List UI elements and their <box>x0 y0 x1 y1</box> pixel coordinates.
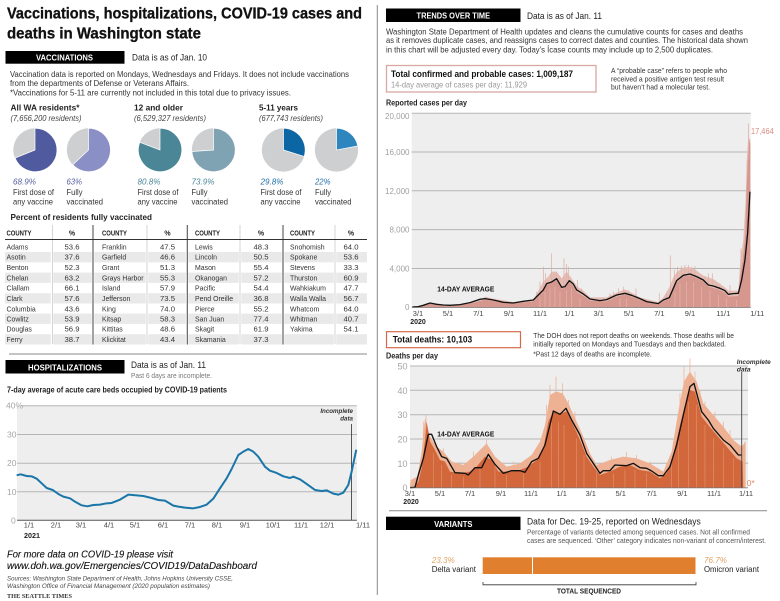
sources: Washington Office of Financial Management (2020 population estimates) <box>7 583 210 590</box>
pie group: 5-11 years: 5-11 years <box>259 102 298 112</box>
line chart: acute care beds: 0 <box>11 516 16 526</box>
note: probable case <box>611 66 727 92</box>
line chart: acute care beds: 30 <box>7 430 17 440</box>
table: percent fully vaccinated by county: 64.0 <box>344 304 358 313</box>
chart: deaths per day: 10 <box>397 459 408 469</box>
pie group: all WA residents: All WA residents* <box>10 102 80 112</box>
chart: deaths per day: 14-DAY AVERAGE <box>437 430 494 438</box>
label: omicron variant: Omicron variant <box>704 565 760 574</box>
line chart: acute care beds: 8/1 <box>212 520 222 530</box>
text block: vaccination notes: Vaccination data is reported on Mondays, Wednesdays and Fridays. It does not include vaccinations <box>10 70 349 79</box>
text block: vaccination notes: from the departments of Defense or Veterans Affairs. <box>10 79 189 88</box>
chart: reported cases per day: 1/11 <box>750 309 764 318</box>
text block: trends explanation: as it removes duplicate cases, and reassigns cases to correct dates and counties. The historical data shown <box>386 36 748 45</box>
chart: deaths per day: 7/1 <box>465 489 475 498</box>
heading: vaccinations: Data is as of Jan. 10 <box>132 52 207 62</box>
table: percent fully vaccinated by county: 43.4 <box>160 335 176 344</box>
chart: deaths per day: 3/1 <box>405 489 415 498</box>
note: deaths reporting <box>533 331 734 358</box>
table: percent fully vaccinated by county: 37.6 <box>65 253 79 262</box>
text block: trends explanation: in this chart will be adjusted every day. Today’s Ícase counts may include up to 2,500 duplicates. <box>386 46 713 55</box>
line chart: acute care beds: 10/1 <box>266 520 280 530</box>
table: percent fully vaccinated by county: 48.6 <box>160 325 175 334</box>
pie group: 5-11 years: vaccinated <box>315 197 352 206</box>
table heading: Percent of residents fully vaccinated <box>10 212 152 222</box>
heading: trends over time: Data is as of Jan. 11 <box>527 11 602 21</box>
heading: vaccinations: VACCINATIONS <box>36 53 93 62</box>
chart: reported cases per day: 3/1 <box>413 309 423 318</box>
table: percent fully vaccinated by county: Klickitat <box>102 335 126 344</box>
text block: trends explanation: Washington State Department of Health updates and cleans the cumulative counts for cases and deaths <box>386 27 743 36</box>
chart: deaths per day <box>397 358 771 506</box>
note: deaths reporting: initially reported on Mondays and Tuesdays and then backdated. <box>533 339 726 348</box>
stacked bar: variants <box>483 557 696 574</box>
pie group: 12 and older: First dose of <box>138 188 179 197</box>
table: percent fully vaccinated by county: 52.3 <box>65 263 79 272</box>
table: percent fully vaccinated by county: Pend Oreille <box>195 294 233 303</box>
pie group: all WA residents: vaccinated <box>66 197 103 206</box>
table: percent fully vaccinated by county: 56.7 <box>344 294 358 303</box>
table: percent fully vaccinated by county <box>5 225 367 345</box>
chart: reported cases per day: 4,000 <box>389 264 410 274</box>
heading: hospitalizations <box>6 360 212 380</box>
line chart: acute care beds: 12/1 <box>320 520 334 530</box>
panel: trends over time <box>385 8 774 506</box>
table: percent fully vaccinated by county: Douglas <box>6 324 32 334</box>
heading: hospitalizations: HOSPITALIZATIONS <box>28 362 102 372</box>
text block: variants note: Percentage of variants detected among sequenced cases. Not all confirmed <box>527 528 750 536</box>
table: percent fully vaccinated by county: 53.6 <box>65 242 79 251</box>
note: probable case: but haven’t had a molecular test. <box>611 83 710 92</box>
callout: total cases: Total confirmed and probable cases: 1,009,187 <box>391 69 573 80</box>
label: omicron variant: 76.7% <box>704 555 727 565</box>
pie group: 12 and older: 12 and older <box>134 102 184 112</box>
table: percent fully vaccinated by county: 53.9 <box>65 314 79 323</box>
line chart: acute care beds: 5/1 <box>130 520 140 530</box>
table: percent fully vaccinated by county: 38.7 <box>65 335 79 344</box>
chart: reported cases per day: 0 <box>405 303 410 312</box>
heading: variants <box>386 516 701 530</box>
table: percent fully vaccinated by county: 73.5 <box>160 294 175 303</box>
pie group: 12 and older: 73.9% <box>192 176 215 186</box>
pie group: 5-11 years: any vaccine <box>260 197 300 206</box>
table: percent fully vaccinated by county: Jefferson <box>102 294 130 303</box>
table: percent fully vaccinated by county: 48.3 <box>254 242 268 251</box>
table: percent fully vaccinated by county: Kittitas <box>102 324 123 334</box>
table: percent fully vaccinated by county: Columbia <box>6 304 37 313</box>
table: percent fully vaccinated by county: 60.9 <box>344 273 358 282</box>
table: percent fully vaccinated by county: 64.0 <box>344 242 358 251</box>
table: percent fully vaccinated by county: 50.5 <box>254 253 268 262</box>
panel divider <box>376 5 378 595</box>
line chart: acute care beds: 4/1 <box>104 520 114 530</box>
table: percent fully vaccinated by county: 57.6 <box>65 294 79 303</box>
line chart: acute care beds: 11/1 <box>294 520 308 530</box>
table: percent fully vaccinated by county: Cowlitz <box>6 314 29 324</box>
table: percent fully vaccinated by county: Skagit <box>195 324 214 334</box>
chart: deaths per day: 11/1 <box>707 489 721 498</box>
table: percent fully vaccinated by county: 40.7 <box>344 314 358 323</box>
table: percent fully vaccinated by county: Asotin <box>6 252 26 262</box>
line chart: acute care beds: 2021 <box>24 531 40 540</box>
table: percent fully vaccinated by county: Grays Harbor <box>102 273 144 282</box>
heading: hospitalizations: Data is as of Jan. 11 <box>131 360 206 370</box>
line chart: acute care beds: 6/1 <box>158 520 168 530</box>
text block: vaccination notes <box>10 70 349 97</box>
table: percent fully vaccinated by county: 43.6 <box>65 304 79 313</box>
chart heading: 7-day average of acute care beds occupied by COVID-19 patients <box>7 385 227 394</box>
chart: reported cases per day: 12,000 <box>385 187 410 196</box>
title <box>7 5 362 42</box>
chart: deaths per day: 0 <box>402 483 408 493</box>
note: deaths reporting: *Past 12 days of deaths are incomplete. <box>533 350 652 358</box>
chart: reported cases per day: 11/1 <box>533 309 547 318</box>
heading: trends over time: TRENDS OVER TIME <box>417 10 490 20</box>
table: percent fully vaccinated by county: % <box>348 230 355 238</box>
sources <box>7 575 233 590</box>
table: percent fully vaccinated by county: % <box>164 230 171 238</box>
table: percent fully vaccinated by county: King <box>102 304 116 313</box>
table: percent fully vaccinated by county: 74.0 <box>160 304 175 313</box>
chart: deaths per day: 40 <box>397 386 408 396</box>
table: percent fully vaccinated by county: 57.9 <box>160 284 175 293</box>
chart: reported cases per day: 9/1 <box>504 309 514 318</box>
line chart: acute care beds: Incomplete <box>320 408 354 415</box>
label: delta variant: Delta variant <box>432 565 477 574</box>
chart: reported cases per day: 1/1 <box>564 309 575 318</box>
chart: deaths per day: 2020 <box>403 499 419 506</box>
table: percent fully vaccinated by county: Walla Walla <box>290 294 327 303</box>
panel: vaccinations <box>5 51 367 345</box>
table: percent fully vaccinated by county: COUNTY <box>195 230 220 238</box>
table: percent fully vaccinated by county: 46.6 <box>160 253 175 262</box>
chart: deaths per day: 5/1 <box>435 489 445 498</box>
table: percent fully vaccinated by county: % <box>69 230 76 238</box>
panel: hospitalizations <box>6 360 370 540</box>
table: percent fully vaccinated by county: COUNTY <box>102 230 127 238</box>
chart: deaths per day: data <box>737 366 751 373</box>
credit: the seattle times: THE SEATTLE TIMES <box>7 593 72 600</box>
pie group: all WA residents: (7,656,200 residents) <box>10 114 82 123</box>
text block: trends explanation <box>386 27 748 55</box>
table: percent fully vaccinated by county: 61.9 <box>254 325 268 334</box>
table: percent fully vaccinated by county: Wahkiakum <box>290 283 326 293</box>
pie group: all WA residents <box>10 102 110 206</box>
title: Vaccinations, hospitalizations, COVID-19 cases and <box>7 5 362 22</box>
callout: total deaths <box>386 332 520 348</box>
pie group: 5-11 years: Fully <box>315 188 331 197</box>
pie group: all WA residents: 63% <box>66 176 82 186</box>
label: omicron variant <box>704 555 760 574</box>
table: percent fully vaccinated by county: Okanogan <box>195 273 227 282</box>
heading: variants: VARIANTS <box>434 519 473 529</box>
table: percent fully vaccinated by county: Whitman <box>290 314 317 324</box>
chart: deaths per day: 3/1 <box>585 489 596 498</box>
line chart: acute care beds <box>6 400 370 540</box>
chart: deaths per day: 20 <box>397 434 408 444</box>
label: delta variant: 23.3% <box>431 555 455 565</box>
pie group: 5-11 years: 29.8% <box>260 176 284 186</box>
pie group: 12 and older: any vaccine <box>138 197 178 206</box>
text block: more data link <box>7 550 258 572</box>
heading: variants: Data for Dec. 19-25, reported on Wednesdays <box>527 516 701 526</box>
table: percent fully vaccinated by county: 47.5 <box>160 242 175 251</box>
heading: trends over time <box>386 8 602 22</box>
table: percent fully vaccinated by county: Thurston <box>290 273 317 282</box>
table: percent fully vaccinated by county: Pierce <box>195 304 215 313</box>
table: percent fully vaccinated by county: Clark <box>6 294 23 303</box>
sources: Sources: Washington State Department of Health, Johns Hopkins University CSSE, <box>7 575 233 582</box>
table: percent fully vaccinated by county: 66.1 <box>65 284 79 293</box>
line chart: acute care beds: 1/11 <box>356 520 370 530</box>
pie group: all WA residents: Fully <box>66 188 83 197</box>
chart: reported cases per day: 3/1 <box>593 309 604 318</box>
table: percent fully vaccinated by county: Adams <box>6 242 28 252</box>
chart: reported cases per day: 20,000 <box>385 112 410 121</box>
table: percent fully vaccinated by county: Chelan <box>6 273 28 282</box>
chart: reported cases per day: 16,000 <box>385 148 410 157</box>
line chart: acute care beds: 2/1 <box>51 520 61 530</box>
chart: reported cases per day: 14-DAY AVERAGE <box>437 284 494 293</box>
pie group: 5-11 years: First dose of <box>260 188 302 197</box>
table: percent fully vaccinated by county: 51.3 <box>160 263 175 272</box>
table: percent fully vaccinated by county: 54.1 <box>344 325 358 334</box>
table: percent fully vaccinated by county: Skamania <box>195 335 227 344</box>
chart: reported cases per day: 5/1 <box>624 309 634 318</box>
table: percent fully vaccinated by county: Snohomish <box>290 242 325 252</box>
table: percent fully vaccinated by county: Whatcom <box>290 304 319 313</box>
line chart: acute care beds: 3/1 <box>76 520 86 530</box>
table: percent fully vaccinated by county: 58.3 <box>160 314 175 323</box>
table: percent fully vaccinated by county: 55.2 <box>254 304 268 313</box>
chart heading: deaths: Deaths per day <box>386 351 438 360</box>
title: deaths in Washington state <box>7 25 201 42</box>
table: percent fully vaccinated by county: 37.3 <box>254 335 268 344</box>
line chart: acute care beds: 1/1 <box>24 520 34 530</box>
heading: vaccinations <box>6 51 207 64</box>
table: percent fully vaccinated by county: Island <box>102 283 120 293</box>
chart: deaths per day: 7/1 <box>646 489 657 498</box>
table: percent fully vaccinated by county: Clallam <box>6 283 30 293</box>
pie group: 12 and older <box>134 102 235 206</box>
table: percent fully vaccinated by county: 33.3 <box>344 263 358 272</box>
line chart: acute care beds: data <box>340 416 354 422</box>
pie group: all WA residents: 68.9% <box>13 176 36 186</box>
chart: reported cases per day: 2020 <box>410 319 426 326</box>
chart heading: cases: Reported cases per day <box>386 98 467 107</box>
note: probable case: received a positive antigen test result <box>611 74 724 83</box>
pie group: 5-11 years: (677,743 residents) <box>259 114 323 123</box>
note: deaths reporting: The DOH does not report deaths on weekends. Those deaths will be <box>533 331 734 340</box>
table: percent fully vaccinated by county: 56.9 <box>65 325 79 334</box>
table: percent fully vaccinated by county: 36.8 <box>254 294 268 303</box>
note: probable case: A “probable case” refers to people who <box>611 66 727 75</box>
callout: total deaths: Total deaths: 10,103 <box>393 334 472 345</box>
bracket: total sequenced: TOTAL SEQUENCED <box>557 586 621 596</box>
pie group: 5-11 years <box>259 102 358 206</box>
chart: deaths per day: 5/1 <box>615 489 626 498</box>
chart: reported cases per day: 17,464 <box>751 127 774 136</box>
pie group: 12 and older: 80.8% <box>138 176 161 186</box>
table: percent fully vaccinated by county: 57.2 <box>254 273 268 282</box>
table: percent fully vaccinated by county: Grant <box>102 263 119 272</box>
line chart: acute care beds: 20 <box>7 458 17 468</box>
chart: reported cases per day: 11/1 <box>716 309 730 318</box>
line chart: acute care beds: 9/1 <box>240 520 250 530</box>
chart: deaths per day: 9/1 <box>677 489 688 498</box>
table: percent fully vaccinated by county: Ferry <box>6 335 23 344</box>
chart: reported cases per day: 7/1 <box>473 309 484 318</box>
table: percent fully vaccinated by county: Lincoln <box>195 252 217 262</box>
text block: variants note: cases are sequenced. ‘Other’ category indicates non-variant of concern/interest. <box>527 536 766 545</box>
table: percent fully vaccinated by county: Benton <box>6 263 28 272</box>
callout: total cases: 14-day average of cases per day: 11,929 <box>391 80 527 89</box>
table: percent fully vaccinated by county: Pacific <box>195 283 216 293</box>
chart: reported cases per day: 9/1 <box>685 309 695 318</box>
callout: total cases <box>386 66 596 92</box>
text block: more data link: www.doh.wa.gov/Emergencies/COVID19/DataDashboard <box>7 561 258 572</box>
table: percent fully vaccinated by county: 55.4 <box>254 263 269 272</box>
table: percent fully vaccinated by county: Yakima <box>290 324 313 334</box>
chart: deaths per day: Incomplete <box>737 359 771 366</box>
table: percent fully vaccinated by county: % <box>258 230 265 238</box>
table: percent fully vaccinated by county: Stevens <box>290 263 315 272</box>
pie group: 5-11 years: 22% <box>314 176 331 186</box>
pie group: 12 and older: (6,529,327 residents) <box>134 114 206 123</box>
table: percent fully vaccinated by county: COUNTY <box>6 230 32 238</box>
table: percent fully vaccinated by county: 54.4 <box>254 284 269 293</box>
table: percent fully vaccinated by county: 47.7 <box>344 284 358 293</box>
line chart: acute care beds: 40% <box>6 400 23 410</box>
chart: reported cases per day: 8,000 <box>389 226 410 234</box>
chart: deaths per day: 0* <box>747 478 755 488</box>
table: percent fully vaccinated by county: 77.4 <box>254 314 269 323</box>
chart: deaths per day: 11/1 <box>524 489 538 498</box>
table: percent fully vaccinated by county: COUNTY <box>290 230 315 238</box>
text block: vaccination notes: *Vaccinations for 5-11 are currently not included in this total due to privacy issues. <box>10 88 291 97</box>
chart: deaths per day: 1/1 <box>556 489 567 498</box>
pie group: 12 and older: vaccinated <box>192 197 228 206</box>
chart: deaths per day: 9/1 <box>496 489 506 498</box>
table: percent fully vaccinated by county: San Juan <box>195 314 224 324</box>
line chart: acute care beds: 7/1 <box>185 520 195 530</box>
chart: reported cases per day: 7/1 <box>654 309 665 318</box>
table: percent fully vaccinated by county: Spokane <box>290 252 317 262</box>
table: percent fully vaccinated by county: Mason <box>195 263 216 272</box>
chart: reported cases per day: 5/1 <box>443 309 453 318</box>
table: percent fully vaccinated by county: Garfield <box>102 252 126 262</box>
table: percent fully vaccinated by county: Kitsap <box>102 314 121 324</box>
label: delta variant <box>431 555 477 574</box>
panel: variants <box>386 516 766 596</box>
table: percent fully vaccinated by county: 53.6 <box>344 253 358 262</box>
chart: deaths per day: 30 <box>397 410 408 420</box>
chart: deaths per day: 1/11 <box>739 489 753 498</box>
text block: more data link: For more data on COVID-19 please visit <box>7 550 174 560</box>
heading: hospitalizations: Past 6 days are incomplete. <box>131 371 212 380</box>
table: percent fully vaccinated by county: Lewis <box>195 242 213 252</box>
chart: deaths per day: 50 <box>397 362 408 372</box>
table: percent fully vaccinated by county: Franklin <box>102 242 127 252</box>
pie group: all WA residents: First dose of <box>13 188 55 197</box>
chart: reported cases per day <box>385 112 774 326</box>
pie group: 12 and older: Fully <box>192 188 208 197</box>
table: percent fully vaccinated by county: 55.3 <box>160 273 175 282</box>
pie group: all WA residents: any vaccine <box>13 197 53 206</box>
line chart: acute care beds: 10 <box>7 487 17 497</box>
table: percent fully vaccinated by county: 63.2 <box>65 273 79 282</box>
text block: variants note <box>527 528 766 545</box>
